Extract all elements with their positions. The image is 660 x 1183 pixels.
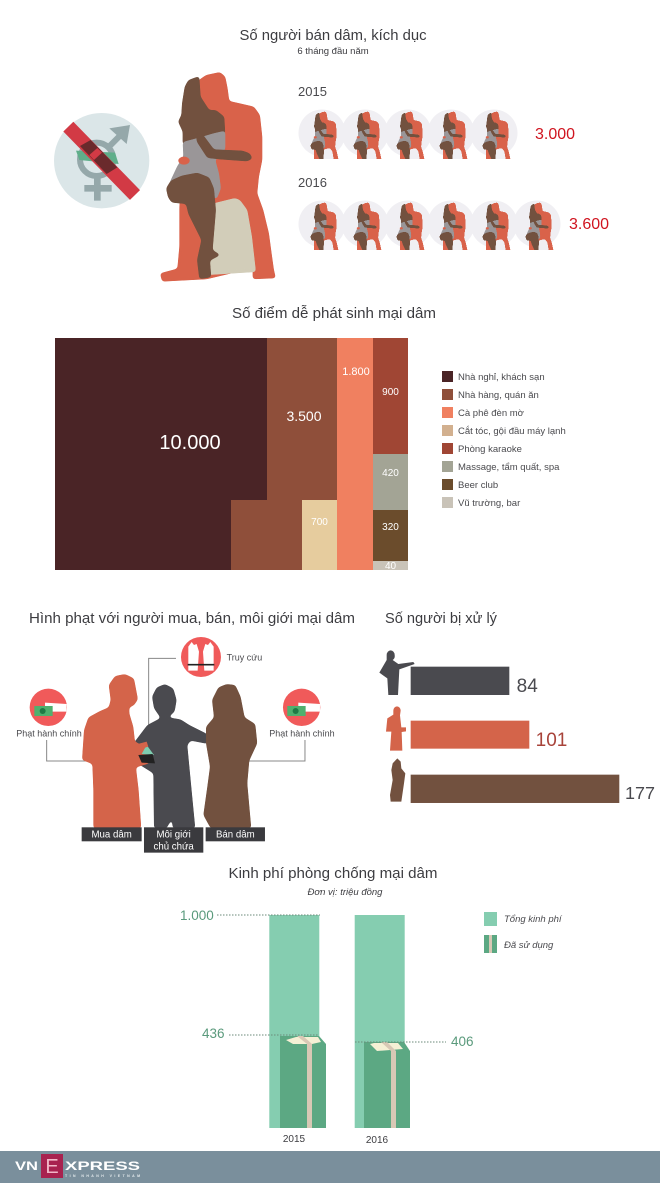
treemap legend: Cắt tóc, gội đầu máy lạnh bbox=[458, 426, 566, 437]
dotted guides bbox=[217, 915, 446, 1042]
treemap legend: Cà phê đèn mờ bbox=[458, 408, 524, 419]
label: buyer bbox=[82, 827, 142, 841]
illustration: three figures with penalties bbox=[16, 637, 335, 853]
budget legend: Tổng kinh phí bbox=[504, 914, 563, 925]
logo: VnExpress: VN bbox=[15, 1159, 38, 1173]
label: 2015: 2015 bbox=[298, 84, 327, 99]
bar: 101 bbox=[411, 721, 529, 749]
treemap chart: 40 bbox=[385, 561, 396, 572]
icon: buyer bbox=[386, 706, 406, 751]
label: broker: Môi giới bbox=[157, 829, 191, 840]
value: 177: 177 bbox=[625, 783, 655, 803]
treemap legend: Beer club bbox=[458, 480, 498, 491]
treemap legend: Vũ trường, bar bbox=[458, 498, 520, 509]
title: sex workers: Số người bán dâm, kích dục bbox=[240, 27, 427, 44]
icon: handcuffed hands bbox=[181, 637, 221, 677]
value 406: 406 bbox=[451, 1034, 474, 1049]
treemap legend: Massage, tẩm quất, spa bbox=[458, 462, 560, 473]
label: fine right: Phạt hành chính bbox=[269, 728, 335, 738]
label: 2016: 2016 bbox=[298, 175, 327, 190]
bar 2015 used bbox=[280, 1036, 326, 1128]
bar: 177 bbox=[411, 775, 619, 803]
value 3.600: 3.600 bbox=[569, 216, 609, 233]
title: penalties: Hình phạt với người mua, bán, môi giới mại dâm bbox=[29, 610, 355, 627]
axis label 2015: 2015 bbox=[283, 1134, 306, 1145]
bar 2016 total bbox=[355, 915, 405, 1128]
value 1.000: 1.000 bbox=[180, 908, 214, 923]
treemap chart: 700 bbox=[311, 517, 328, 528]
value: 84: 84 bbox=[517, 676, 538, 697]
title: people handled: Số người bị xử lý bbox=[385, 610, 497, 627]
icon: fine right bbox=[283, 689, 320, 726]
money exchange bbox=[142, 745, 154, 755]
pictogram row 2015 bbox=[298, 110, 518, 173]
budget legend: Đã sử dụng bbox=[504, 940, 554, 951]
figure: buyer bbox=[82, 674, 150, 828]
treemap chart: 900 bbox=[382, 387, 399, 398]
footer bar bbox=[0, 1151, 660, 1183]
logo: VnExpress: E bbox=[45, 1156, 59, 1178]
title: venues: Số điểm dễ phát sinh mại dâm bbox=[232, 305, 436, 322]
figure: broker bbox=[132, 684, 208, 828]
treemap legend bbox=[442, 371, 566, 509]
bar 2015 total bbox=[269, 915, 319, 1128]
connector lines bbox=[47, 658, 305, 761]
bar 2016 used bbox=[364, 1042, 410, 1128]
treemap chart: 1.800 bbox=[342, 366, 370, 378]
budget chart bbox=[180, 908, 474, 1146]
value 3.000: 3.000 bbox=[535, 126, 575, 143]
label: prosecute: Truy cứu bbox=[227, 653, 262, 663]
value: 101: 101 bbox=[536, 730, 567, 751]
treemap legend: Nhà hàng, quán ăn bbox=[458, 390, 539, 401]
pictogram row 2016 bbox=[298, 200, 560, 264]
figure: seller bbox=[203, 684, 257, 828]
illustration: couple with seat bbox=[160, 72, 276, 282]
logo: VnExpress bbox=[15, 1154, 140, 1178]
treemap chart: 420 bbox=[382, 468, 399, 479]
icon: fine left bbox=[30, 689, 67, 726]
bar: 84 bbox=[411, 667, 509, 695]
logo: VnExpress: TIN NHANH VIETNAM bbox=[65, 1174, 140, 1178]
treemap chart: 10.000 bbox=[159, 432, 221, 454]
treemap chart: 3.500 bbox=[286, 408, 322, 424]
logo: VnExpress: XPRESS bbox=[65, 1159, 140, 1173]
title: budget: Kinh phí phòng chống mại dâm bbox=[228, 865, 438, 882]
label: seller: Bán dâm bbox=[216, 829, 255, 840]
bar chart: people handled bbox=[379, 650, 655, 803]
subtitle: unit: Đơn vị: triệu đồng bbox=[308, 887, 383, 898]
label: buyer: Mua dâm bbox=[92, 829, 132, 840]
treemap chart bbox=[55, 338, 408, 572]
subtitle: 6 tháng đầu năm bbox=[297, 46, 369, 57]
label: fine left: Phạt hành chính bbox=[16, 728, 82, 738]
icon: seller bbox=[390, 758, 405, 802]
label: broker: chủ chứa bbox=[154, 841, 194, 852]
budget legend bbox=[484, 912, 563, 953]
label: seller bbox=[206, 827, 265, 841]
icon: banned gender symbol bbox=[54, 113, 149, 208]
label: broker bbox=[144, 827, 203, 853]
value 436: 436 bbox=[202, 1026, 225, 1041]
treemap chart: 320 bbox=[382, 522, 399, 533]
treemap legend: Phòng karaoke bbox=[458, 444, 522, 455]
treemap legend: Nhà nghỉ, khách sạn bbox=[458, 372, 545, 383]
icon: broker bbox=[379, 650, 415, 695]
axis label 2016: 2016 bbox=[366, 1135, 389, 1146]
